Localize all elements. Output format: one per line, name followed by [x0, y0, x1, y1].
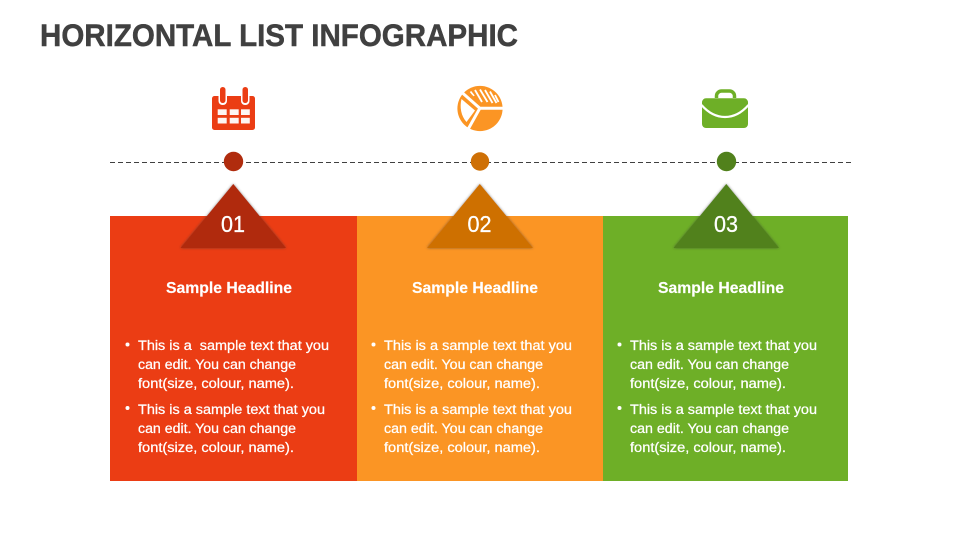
- panel: 01: [110, 216, 357, 481]
- bullet list 03: This is a sample text that you: [630, 402, 817, 417]
- title: HORIZONTAL LIST INFOGRAPHIC: [40, 17, 518, 53]
- white inner area of left slice: [461, 99, 475, 122]
- triangle badge 02: [427, 184, 533, 248]
- bullet list 03: can edit. You can change: [630, 421, 789, 436]
- bullet list 02: font(size, colour, name).: [384, 440, 540, 455]
- hatched top slice: [470, 90, 498, 103]
- bullet list 02: font(size, colour, name).: [384, 376, 540, 391]
- headline 02: Sample Headline: [412, 280, 538, 297]
- bullet list 02: This is a sample text that you: [384, 402, 572, 417]
- triangle badge 01: 01: [221, 211, 245, 237]
- icon: calendar: [212, 86, 255, 130]
- bullet list 02: can edit. You can change: [384, 357, 543, 372]
- triangle badge 03: 03: [714, 211, 738, 237]
- timeline dot 02: [471, 152, 489, 171]
- slice gaps: [458, 89, 505, 133]
- icon: briefcase: [702, 91, 748, 128]
- bullet list 01: This is a sample text that you: [138, 402, 325, 417]
- bullet list 01: [126, 338, 329, 455]
- bullet list 01: This is a sample text that you: [138, 338, 329, 353]
- bullet list 01: can edit. You can change: [138, 421, 296, 436]
- bullet list 03: can edit. You can change: [630, 357, 789, 372]
- bullet list 03: This is a sample text that you: [630, 338, 817, 353]
- bullet list 03: font(size, colour, name).: [630, 440, 786, 455]
- triangle badge 02: 02: [468, 211, 492, 237]
- headline 03: Sample Headline: [658, 280, 784, 297]
- bullet list 03: [618, 338, 817, 455]
- bullet list 01: font(size, colour, name).: [138, 376, 294, 391]
- triangle badge 03: [674, 184, 779, 248]
- timeline dot 01: [224, 152, 243, 171]
- bullet list 02: [372, 338, 572, 455]
- icon: pie chart: [457, 86, 505, 133]
- bullet list 02: This is a sample text that you: [384, 338, 572, 353]
- timeline dot 03: [717, 152, 736, 171]
- bullet list 01: can edit. You can change: [138, 357, 296, 372]
- panel: 03: [603, 216, 848, 481]
- dashed timeline: [110, 162, 851, 164]
- bullet list 03: font(size, colour, name).: [630, 376, 786, 391]
- triangle badge 01: [180, 184, 286, 248]
- headline 01: Sample Headline: [166, 280, 292, 297]
- panel: 02: [357, 216, 603, 481]
- bullet list 02: can edit. You can change: [384, 421, 543, 436]
- bullet list 01: font(size, colour, name).: [138, 440, 294, 455]
